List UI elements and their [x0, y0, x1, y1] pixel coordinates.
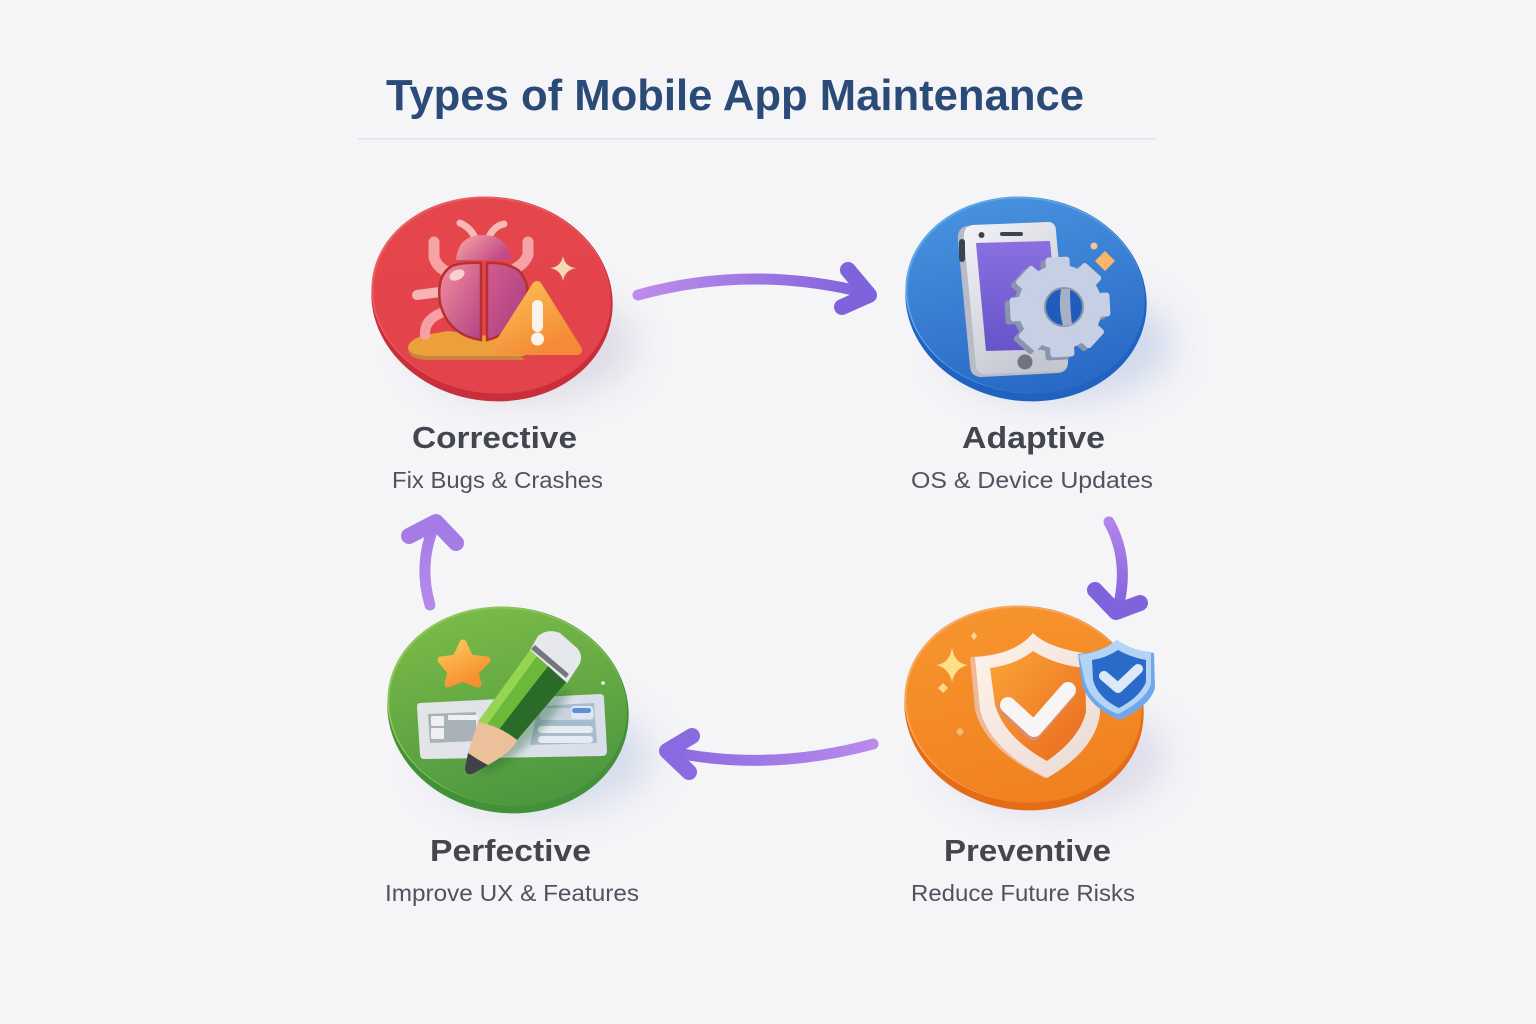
- icon: sparkle: [550, 256, 576, 281]
- panel: corrective: [358, 181, 635, 493]
- panel: preventive: [891, 590, 1167, 906]
- label: perfective: Perfective: [430, 833, 591, 868]
- title: Types of Mobile App Maintenance: [386, 71, 1084, 120]
- panel: adaptive: [892, 181, 1172, 493]
- label: preventive: Preventive: [944, 833, 1111, 868]
- arrow: perfective to corrective: [409, 522, 456, 605]
- panel: perfective: [374, 591, 652, 906]
- icon: orange base: [408, 331, 525, 360]
- disk: green: [374, 591, 652, 829]
- icon: small sparkle: [601, 681, 605, 685]
- arrow: preventive to perfective: [667, 736, 873, 772]
- description: preventive: Reduce Future Risks: [911, 880, 1135, 906]
- icon: form card: [417, 694, 607, 759]
- icon: sparkles: [936, 632, 977, 736]
- disk: orange: [891, 590, 1167, 826]
- label: adaptive: Adaptive: [962, 420, 1105, 455]
- icon: gear: [1004, 256, 1111, 361]
- icon: pencil: [465, 631, 581, 775]
- disk: red: [358, 181, 635, 417]
- icon: phone: [958, 222, 1068, 377]
- icon: warning triangle: [496, 286, 577, 350]
- description: corrective: Fix Bugs & Crashes: [392, 467, 603, 493]
- arrow: adaptive to preventive: [1095, 522, 1140, 612]
- label: corrective: Corrective: [412, 420, 577, 455]
- disk: blue: [892, 181, 1172, 417]
- arrow: corrective to adaptive: [638, 270, 869, 307]
- description: perfective: Improve UX & Features: [385, 880, 639, 906]
- icon: main shield: [970, 633, 1100, 778]
- icon: star: [441, 643, 487, 684]
- icon: bug: [417, 223, 528, 340]
- icon: blue shield: [1078, 640, 1155, 720]
- description: adaptive: OS & Device Updates: [911, 467, 1153, 493]
- icon: orange diamond and dot: [1090, 242, 1115, 271]
